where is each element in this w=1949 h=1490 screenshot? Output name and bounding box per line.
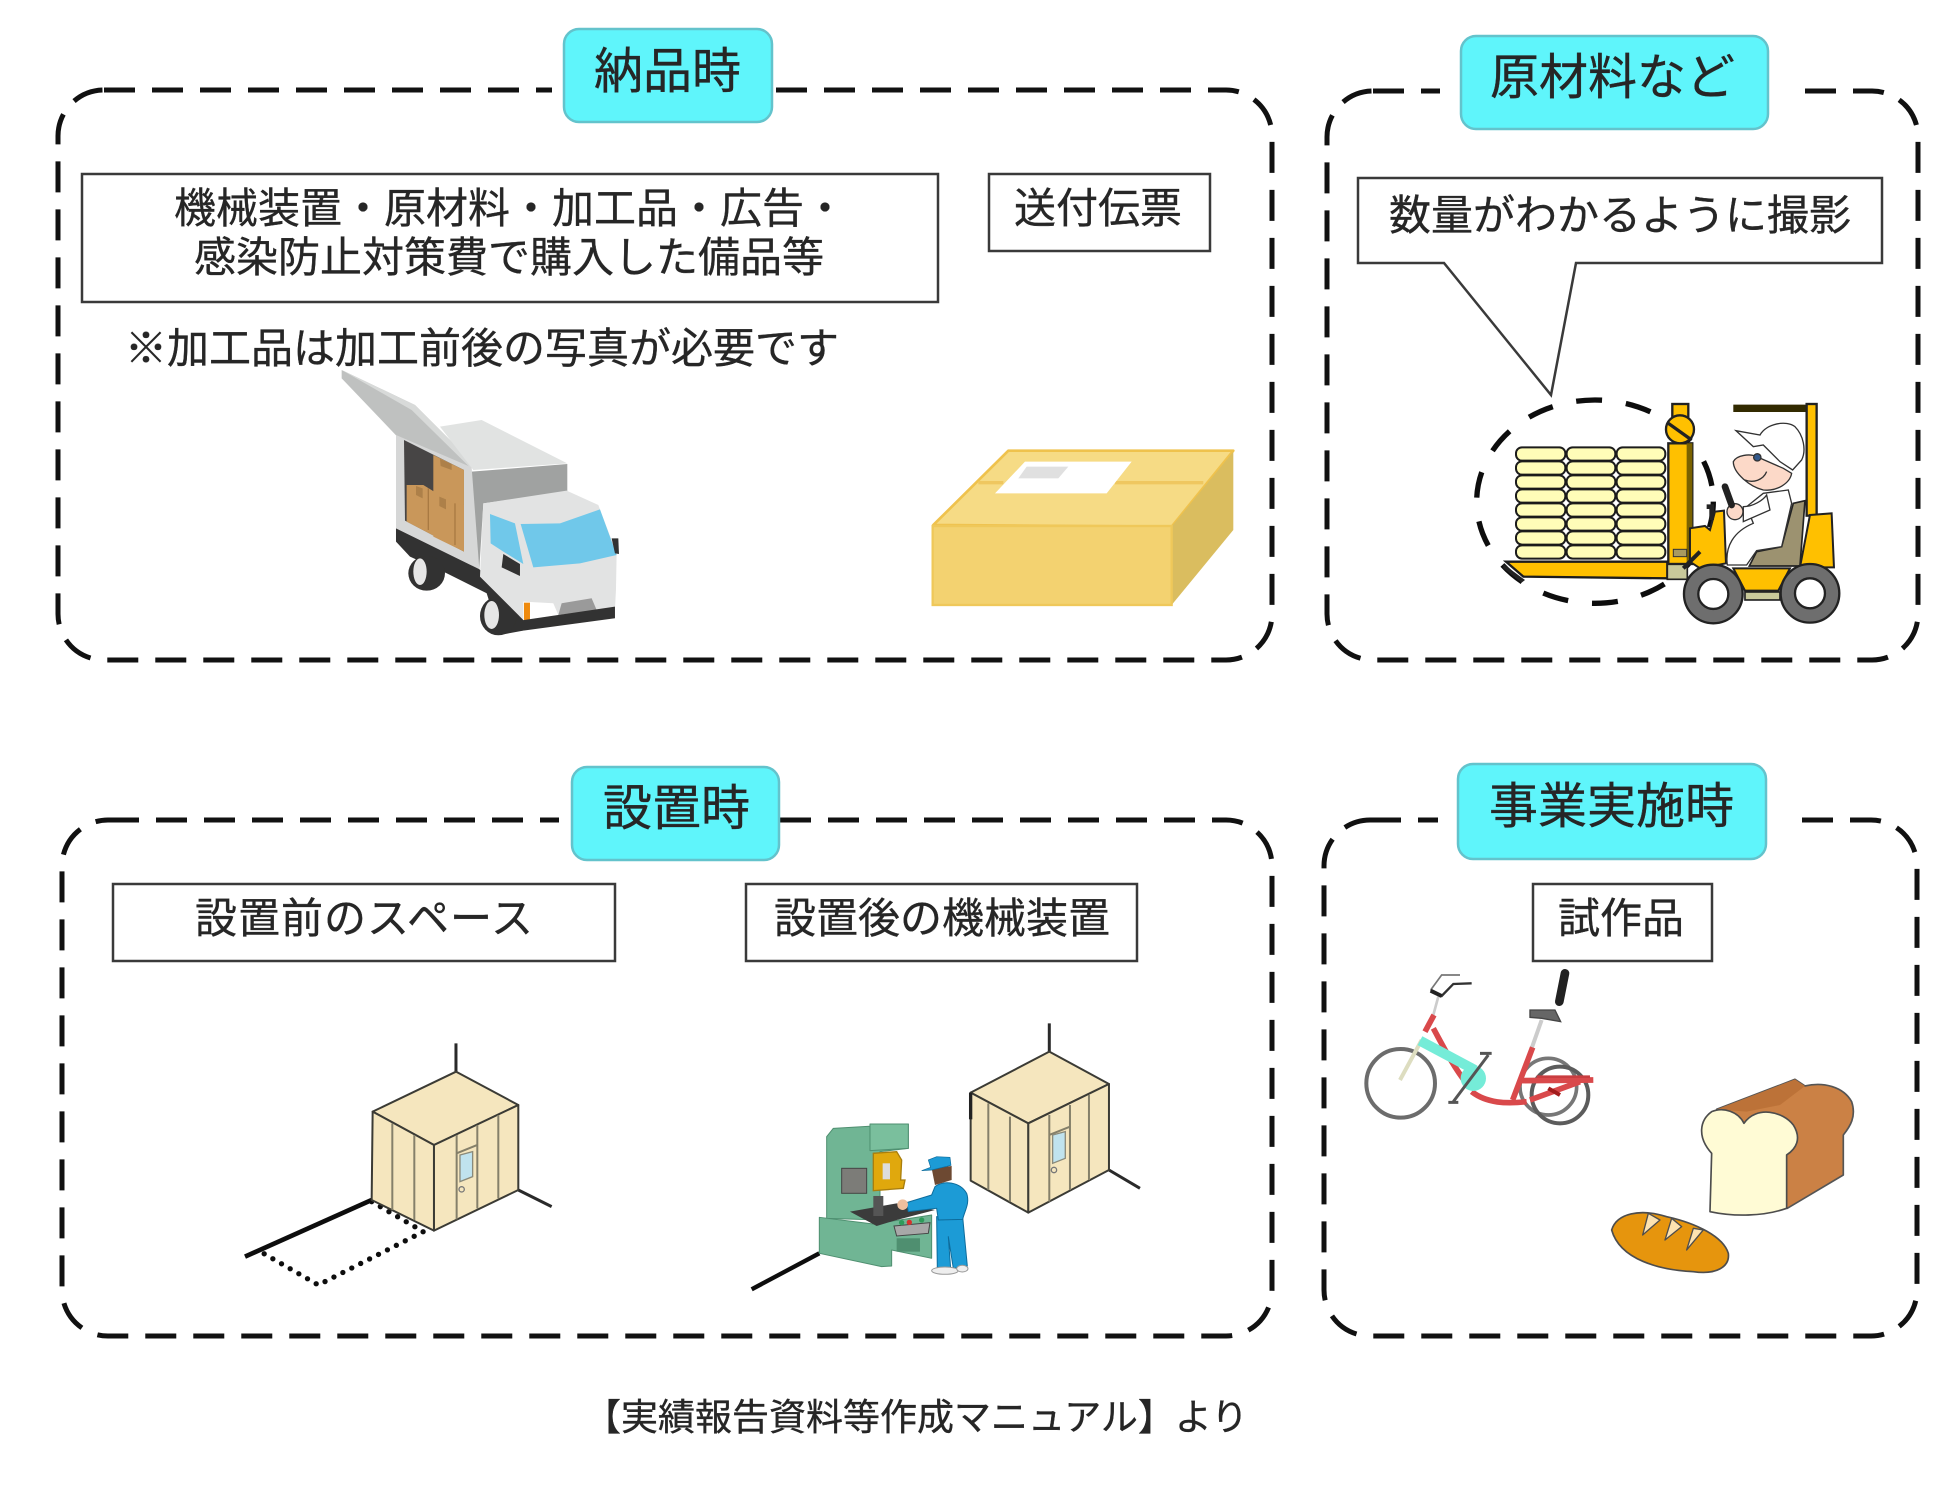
panel: raw materials [1327, 36, 1918, 660]
heading tab: installation [559, 767, 779, 860]
icon: bread loaf and baguette [1612, 1079, 1853, 1272]
label box: purchased goods [82, 174, 938, 302]
heading tab: delivery: 納品時 [594, 45, 741, 99]
heading tab: installation: 設置時 [603, 782, 750, 836]
footer source note: 【実績報告資料等作成マニュアル】より [584, 1397, 1248, 1438]
sub-icon: press machine [819, 1124, 932, 1267]
heading tab: raw materials [1440, 36, 1788, 129]
panel: installation [62, 767, 1272, 1336]
label box: before installation [113, 884, 615, 961]
icon: empty room space [245, 1043, 552, 1285]
note: processed goods: ※加工品は加工前後の写真が必要です [125, 325, 839, 372]
callout: photograph quantity [1358, 178, 1882, 395]
icon: machine and worker beside room [752, 1023, 1140, 1289]
icon: forklift carrying sacks [1477, 400, 1839, 623]
label box: delivery slip: 送付伝票 [1014, 185, 1182, 232]
sub-icon: worker [907, 1183, 968, 1268]
label box: before installation: 設置前のスペース [195, 895, 534, 942]
heading tab: delivery [552, 29, 772, 122]
label box: prototype: 試作品 [1558, 895, 1684, 942]
icon: prototype tricycle [1366, 973, 1593, 1123]
label box: purchased goods: 機械装置・原材料・加工品・広告・ [174, 185, 846, 232]
label box: prototype [1533, 884, 1712, 961]
icon: cardboard box [933, 451, 1233, 605]
label box: after installation [746, 884, 1137, 961]
heading tab: project implementation [1438, 764, 1786, 859]
label box: delivery slip [989, 174, 1210, 251]
heading tab: raw materials: 原材料など [1490, 51, 1735, 105]
panel: delivery [58, 29, 1272, 660]
sub-icon: driver [1727, 423, 1804, 565]
heading tab: project implementation: 事業実施時 [1489, 780, 1734, 834]
icon: delivery truck [342, 370, 619, 635]
panel: project implementation [1324, 764, 1917, 1336]
label box: purchased goods: 感染防止対策費で購入した備品等 [194, 234, 824, 281]
callout: photograph quantity: 数量がわかるように撮影 [1389, 192, 1851, 239]
label box: after installation: 設置後の機械装置 [774, 895, 1110, 942]
